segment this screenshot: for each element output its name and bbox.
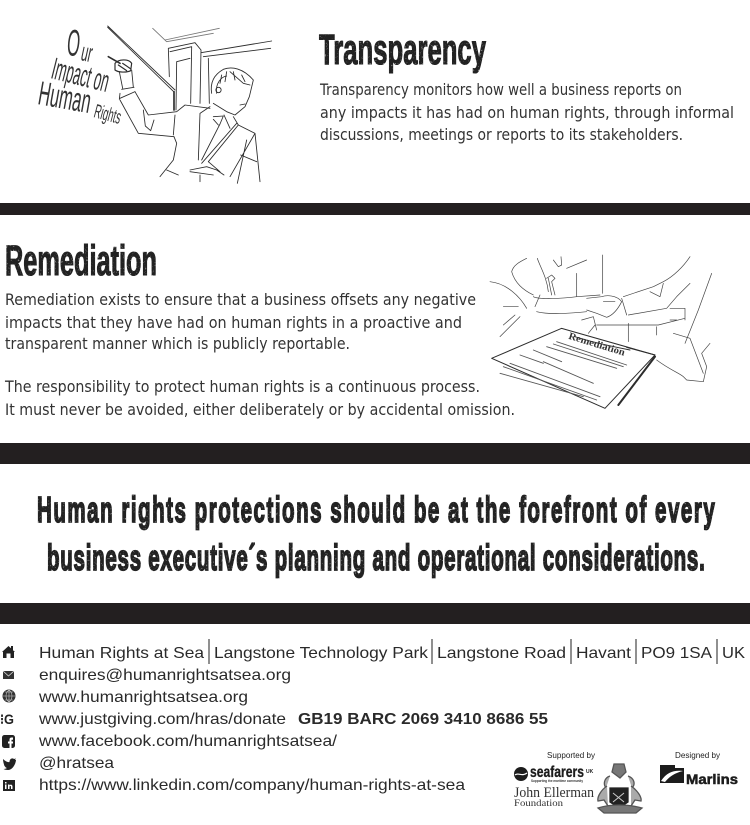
icon: Facebook (2, 735, 15, 748)
callout: closing statement: Human rights protections should be at the forefront of every (37, 490, 715, 531)
logos: supporters (514, 750, 738, 813)
logo: John Ellerman Foundation (514, 785, 595, 809)
Facebook address: www.facebook.com/humanrightsatsea/ (38, 733, 338, 750)
email: enquires@humanrightsatsea.org (39, 667, 291, 684)
logo: Seafarers UK: Supporting the maritime community (531, 778, 584, 783)
illustration: handshake over a Remediation document (490, 255, 712, 408)
icon: LinkedIn (3, 780, 15, 791)
logo: coat of arms (598, 764, 642, 813)
logo: Marlins: Marlins (686, 771, 738, 787)
text block: remediation description: impacts that they have had on human rights in a proactive and (5, 313, 462, 332)
icon: envelope (3, 671, 14, 679)
logo: John Ellerman Foundation: John Ellerman (514, 785, 595, 801)
handwritten whiteboard text: Impact on (48, 53, 113, 100)
callout: closing statement: business executive´s planning and operational considerations. (47, 538, 705, 579)
handwritten whiteboard text (36, 23, 123, 129)
website: www.humanrightsatsea.org (38, 689, 248, 706)
text block: remediation description: Remediation exists to ensure that a business offsets any negative (5, 290, 476, 309)
address line: UK (722, 645, 745, 662)
icon: home (2, 646, 15, 658)
callout: closing statement (37, 490, 715, 579)
logo: Marlins (660, 765, 738, 787)
text block: remediation description: The responsibility to protect human rights is a continuous process. (4, 377, 480, 396)
text block: remediation description: It must never be avoided, either deliberately or by accidental omission. (5, 400, 515, 419)
divider bar 3 (0, 603, 750, 624)
icon: Twitter (3, 758, 16, 770)
heading: Transparency: Transparency (319, 26, 486, 74)
address line: Human Rights at Sea (39, 645, 204, 662)
text block: transparency description (319, 80, 734, 144)
heading: Remediation: Remediation (5, 237, 157, 285)
icon: JustGiving: ⁝G (0, 711, 14, 727)
label: designed by: Designed by (675, 750, 721, 760)
donation line: GB19 BARC 2069 3410 8686 55 (298, 711, 548, 728)
address line (39, 639, 745, 664)
LinkedIn address: https://www.linkedin.com/company/human-rights-at-sea (39, 777, 465, 794)
text block: remediation description (4, 290, 515, 419)
logo: Seafarers UK (514, 764, 594, 783)
text block: remediation description: transparent manner which is publicly reportable. (5, 334, 350, 353)
divider bar 1 (0, 203, 750, 215)
address line: Langstone Road (437, 645, 566, 662)
address line: PO9 1SA (641, 645, 712, 662)
logo: John Ellerman Foundation: Foundation (514, 799, 563, 809)
label: supported by: Supported by (547, 750, 596, 760)
handwritten whiteboard text: Human (36, 74, 94, 121)
address line: Langstone Technology Park (214, 645, 429, 662)
icon: globe (2, 690, 16, 702)
contact list (0, 639, 745, 794)
handwritten whiteboard text: O (65, 23, 82, 65)
text block: transparency description: discussions, meetings or reports to its stakeholders. (320, 125, 683, 144)
divider bar 2 (0, 443, 750, 464)
address line: Havant (576, 645, 632, 662)
donation line (38, 711, 548, 728)
logo: Seafarers UK: seafarers (530, 764, 584, 781)
illustration: man writing on a whiteboard (36, 23, 272, 183)
text block: transparency description: Transparency monitors how well a business reports on (319, 80, 682, 99)
handwritten whiteboard text: ur (79, 39, 95, 69)
handwritten whiteboard text: Rights (92, 101, 123, 129)
logo: Seafarers UK: UK (586, 769, 594, 775)
donation line: www.justgiving.com/hras/donate (38, 711, 286, 728)
document title: Remediation (567, 331, 627, 359)
Twitter handle: @hratsea (39, 755, 114, 772)
